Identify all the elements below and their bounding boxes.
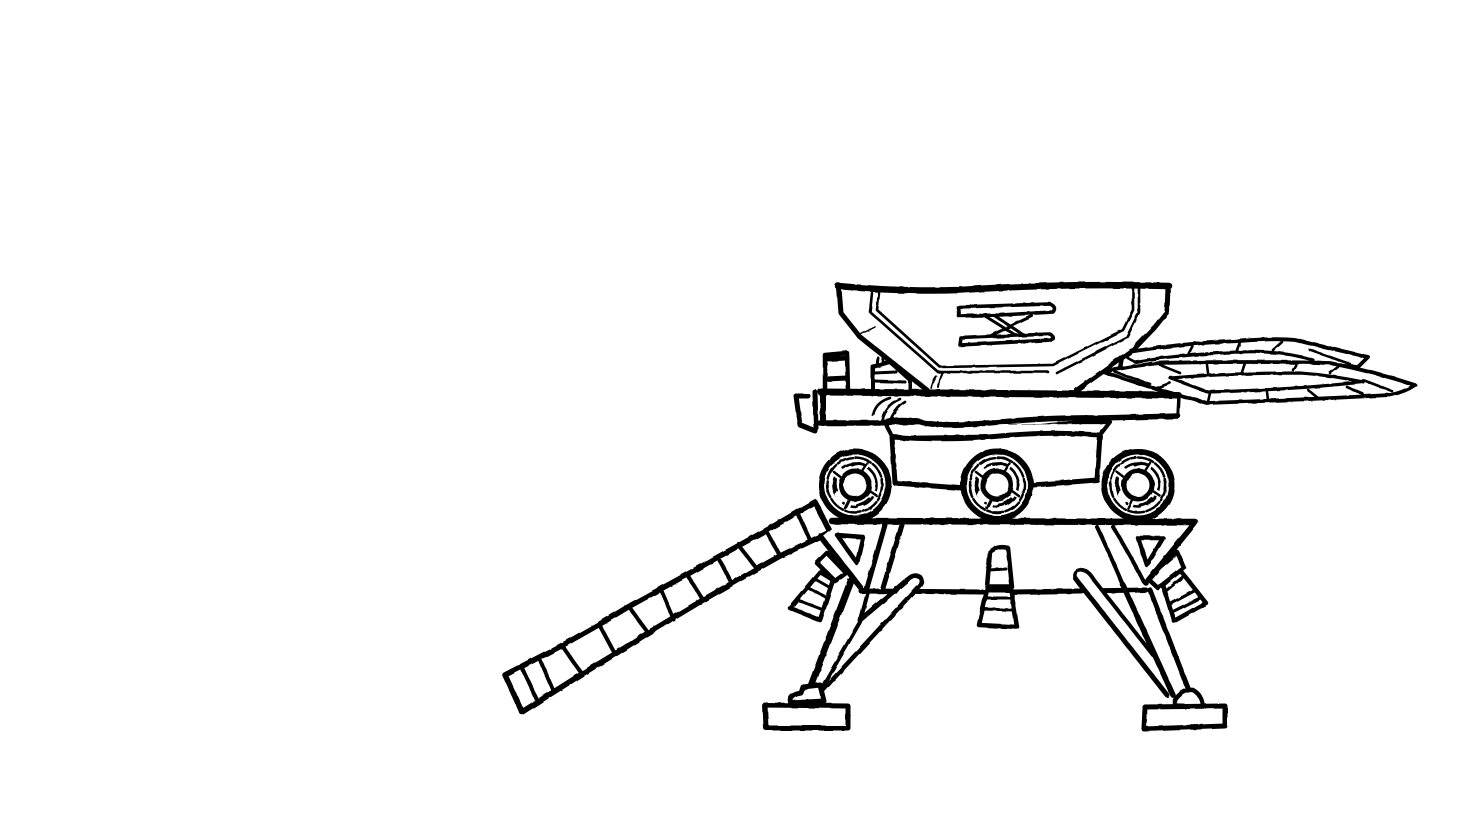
wheels: [822, 452, 1172, 518]
center thruster: [979, 547, 1017, 627]
right thruster: [1147, 552, 1206, 621]
right foot: [1144, 706, 1225, 729]
hopper inner outline: [870, 289, 1139, 373]
platform wrap folds: [873, 398, 905, 421]
hopper emblem: [958, 304, 1054, 345]
right inner triangle: [1138, 538, 1163, 565]
left ankle: [790, 685, 824, 703]
rear cylinder: [873, 354, 910, 392]
upper wing panel: [1120, 339, 1368, 370]
upper platform: [820, 392, 1180, 425]
left inner triangle: [837, 535, 863, 563]
ramp: [505, 502, 830, 712]
right ankle: [1175, 690, 1203, 707]
left leg: [765, 525, 921, 728]
left small tower: [825, 353, 848, 392]
left thruster: [790, 553, 846, 620]
lower deck: [820, 521, 1195, 592]
hopper: [838, 284, 1169, 392]
mid body: [885, 422, 1110, 488]
left foot: [765, 705, 848, 728]
side hook: [796, 392, 816, 431]
right leg: [1075, 527, 1225, 729]
lower wing panel: [1103, 362, 1415, 403]
lower wing inner vane: [1170, 373, 1363, 392]
